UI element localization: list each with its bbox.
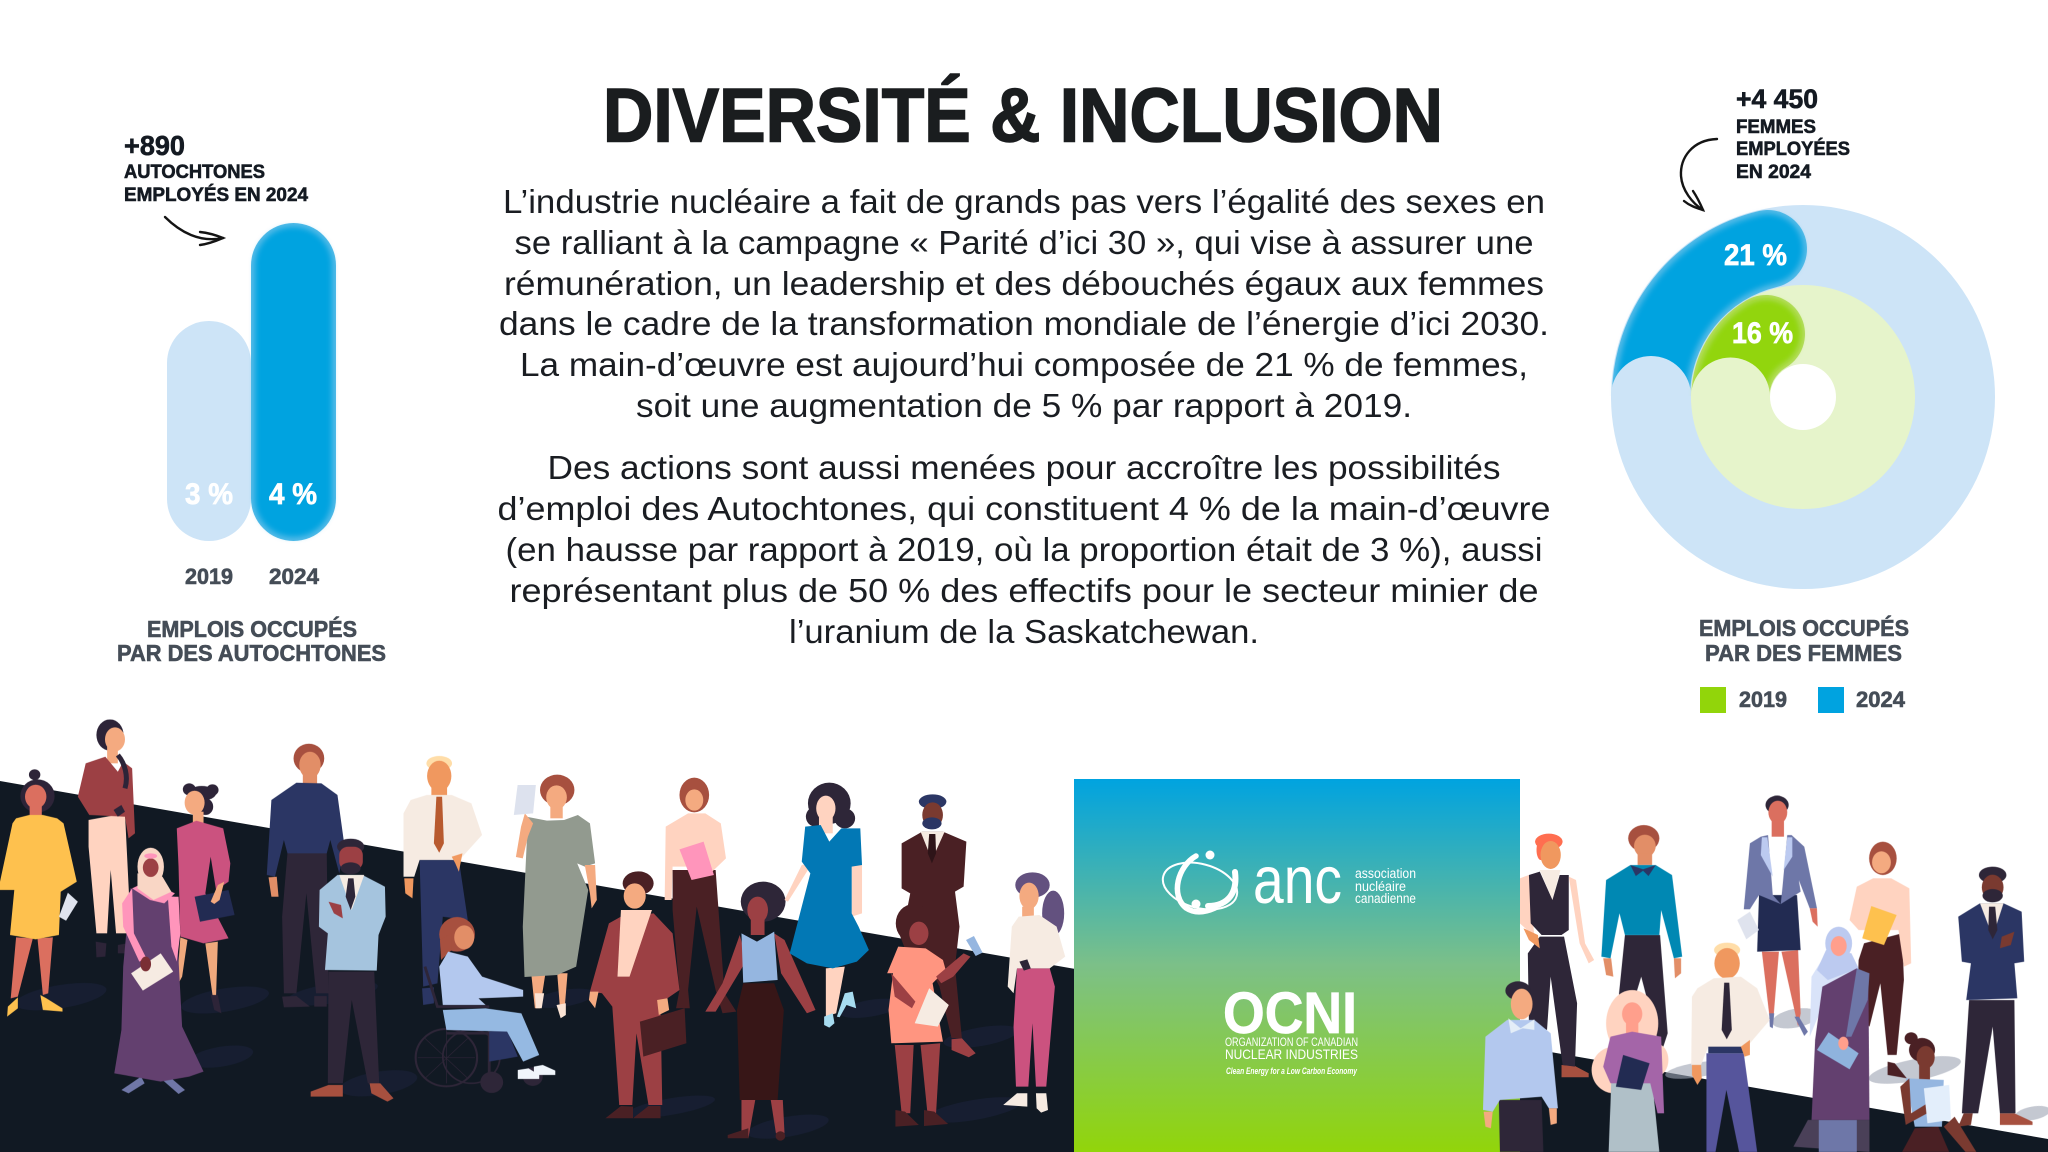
callout: +4 450: EN 2024 [1736,161,1811,183]
chart caption: PAR DES FEMMES [1705,640,1902,666]
person: woman in purple abaya with hijab [114,848,204,1094]
logo: OCNI: Clean Energy for a Low Carbon Economy [1226,1066,1358,1076]
logo: OCNI: NUCLEAR INDUSTRIES [1225,1046,1358,1062]
person: bearded man in light blue jacket [311,839,394,1102]
person: woman in wheelchair [416,917,555,1093]
value: 4 %: 4 % [269,478,317,511]
person: woman in grey blazer [1737,796,1818,1036]
person: woman in pink dress [177,783,235,1013]
panel: women jobs radial chart [1611,84,1995,713]
logo: OCNI [1223,981,1358,1076]
person: man in navy shirt [267,744,345,1007]
chart caption: EMPLOIS OCCUPÉS [1699,614,1909,641]
value: 3 %: 3 % [185,478,233,511]
bar: 2019 [167,321,251,541]
text block: gender equality paragraph: se ralliant à la campagne « Parité d’ici 30 », qui vise à assurer une [514,224,1534,261]
callout: +4 450: FEMMES [1736,116,1816,138]
person: man in pale blue shirt, front left [1483,981,1558,1152]
text block: gender equality paragraph: dans le cadre de la transformation mondiale de l’énergie d’ici 2030. [499,305,1549,342]
text block: gender equality paragraph: rémunération, un leadership et des débouchés égaux aux femmes [504,265,1544,302]
ring value: 2019 [1730,334,1766,397]
person: woman in blue top with afro [705,882,816,1141]
person: woman with yellow folder [1850,842,1911,1078]
chart caption [117,615,386,666]
text block: gender equality paragraph: La main-d’œuvre est aujourd’hui composée de 21 % de femmes, [520,346,1528,383]
person: woman in sage dress with paper [514,775,597,1018]
callout: +890: EMPLOYÉS EN 2024 [124,183,308,206]
arrow: to 21 % ring [1681,139,1717,210]
text block: Indigenous employment paragraph: l’uranium de la Saskatchewan. [789,613,1259,650]
person: blonde woman in purple sweater [1592,990,1668,1152]
text block: Indigenous employment paragraph: Des actions sont aussi menées pour accroître les possibilités [548,449,1500,486]
illustration: right crowd, back man in vest [1520,834,1594,1077]
person: woman in cream blouse with pink folder [665,778,736,1013]
panel: Indigenous jobs bar chart [117,130,386,666]
logo: anc: nucléaire [1355,879,1406,894]
axis label: 2019: 2019 [185,564,233,589]
person: bearded man in dark suit [902,794,976,1057]
floor shadows [1664,1005,2048,1123]
logo: anc: canadienne [1355,891,1416,906]
text block: Indigenous employment paragraph: représentant plus de 50 % des effectifs pour le secteur minier de [510,572,1538,609]
callout: +4 450 [1736,84,1850,183]
illustration: left crowd, right half [514,775,1065,1143]
arrow: to 2024 bar [165,217,223,245]
callout: +890: AUTOCHTONES [124,161,265,183]
ring track: outer [1611,205,1995,589]
logo: OCNI: OCNI [1223,981,1357,1046]
logo: anc: anc [1253,843,1342,918]
chart caption [1699,614,1909,666]
logo: OCNI: ORGANIZATION OF CANADIAN [1225,1037,1358,1049]
chart caption: PAR DES AUTOCHTONES [117,640,386,666]
value: 16 %: 16 % [1732,317,1793,350]
person: blond man with tie [404,756,482,1005]
title: DIVERSITÉ & INCLUSION [603,74,1443,158]
person: man in white shirt with dark tie [1691,943,1770,1152]
logo: anc [1158,843,1416,918]
chart caption: EMPLOIS OCCUPÉS [147,615,357,642]
ring track: inner [1691,285,1915,509]
callout: +4 450: +4 450 [1736,84,1818,114]
axis label: 2024: 2024 [269,564,320,589]
person: man in burgundy suit with briefcase [589,871,686,1118]
legend [1700,687,1906,713]
callout: +890 [124,130,308,206]
person: seated woman with paper [1900,1032,1976,1152]
person: man in teal shirt [1601,825,1682,1053]
text block: gender equality paragraph: soit une augmentation de 5 % par rapport à 2019. [636,387,1412,424]
person: woman with lavender hijab [1793,927,1869,1152]
logo: anc: association [1355,866,1416,881]
person: woman in salmon dress with phone [887,904,983,1127]
person: man in blue suit with beard [1958,867,2033,1127]
callout: +890: +890 [124,130,185,161]
ring cap: inner [1691,358,1770,436]
floor shadows [532,985,1023,1143]
illustration: right crowd [1483,796,2048,1152]
person: woman in yellow dress [0,769,78,1017]
text block: Indigenous employment paragraph [498,449,1550,650]
illustration: left crowd, back and middle rows [0,719,555,1102]
text block: Indigenous employment paragraph: (en hausse par rapport à 2019, où la proportion était de 3 %), aussi [506,531,1542,568]
bar: 2024 [251,223,336,541]
callout: +4 450: EMPLOYÉES [1736,137,1850,160]
floor shadows [13,976,419,1101]
ring value: 2024 [1651,249,1768,397]
panel: logo block [1074,779,1520,1152]
text block: gender equality paragraph [499,183,1549,424]
ring cap: outer [1611,356,1691,436]
legend: 2019 [1739,687,1787,712]
text block: Indigenous employment paragraph: d’emploi des Autochtones, qui constituent 4 % de la main-d’œuvre [498,490,1550,527]
value: 21 %: 21 % [1724,239,1787,272]
dark diagonal floor [0,781,2048,1152]
ring centre [1770,364,1836,430]
text block: gender equality paragraph: L’industrie nucléaire a fait de grands pas vers l’égalité des sexes en [503,183,1545,220]
person: woman in brown blouse [78,719,135,957]
legend: 2024 [1856,687,1906,712]
person: woman in blue dress [785,783,869,1028]
person: woman with purple hair [1003,872,1065,1113]
